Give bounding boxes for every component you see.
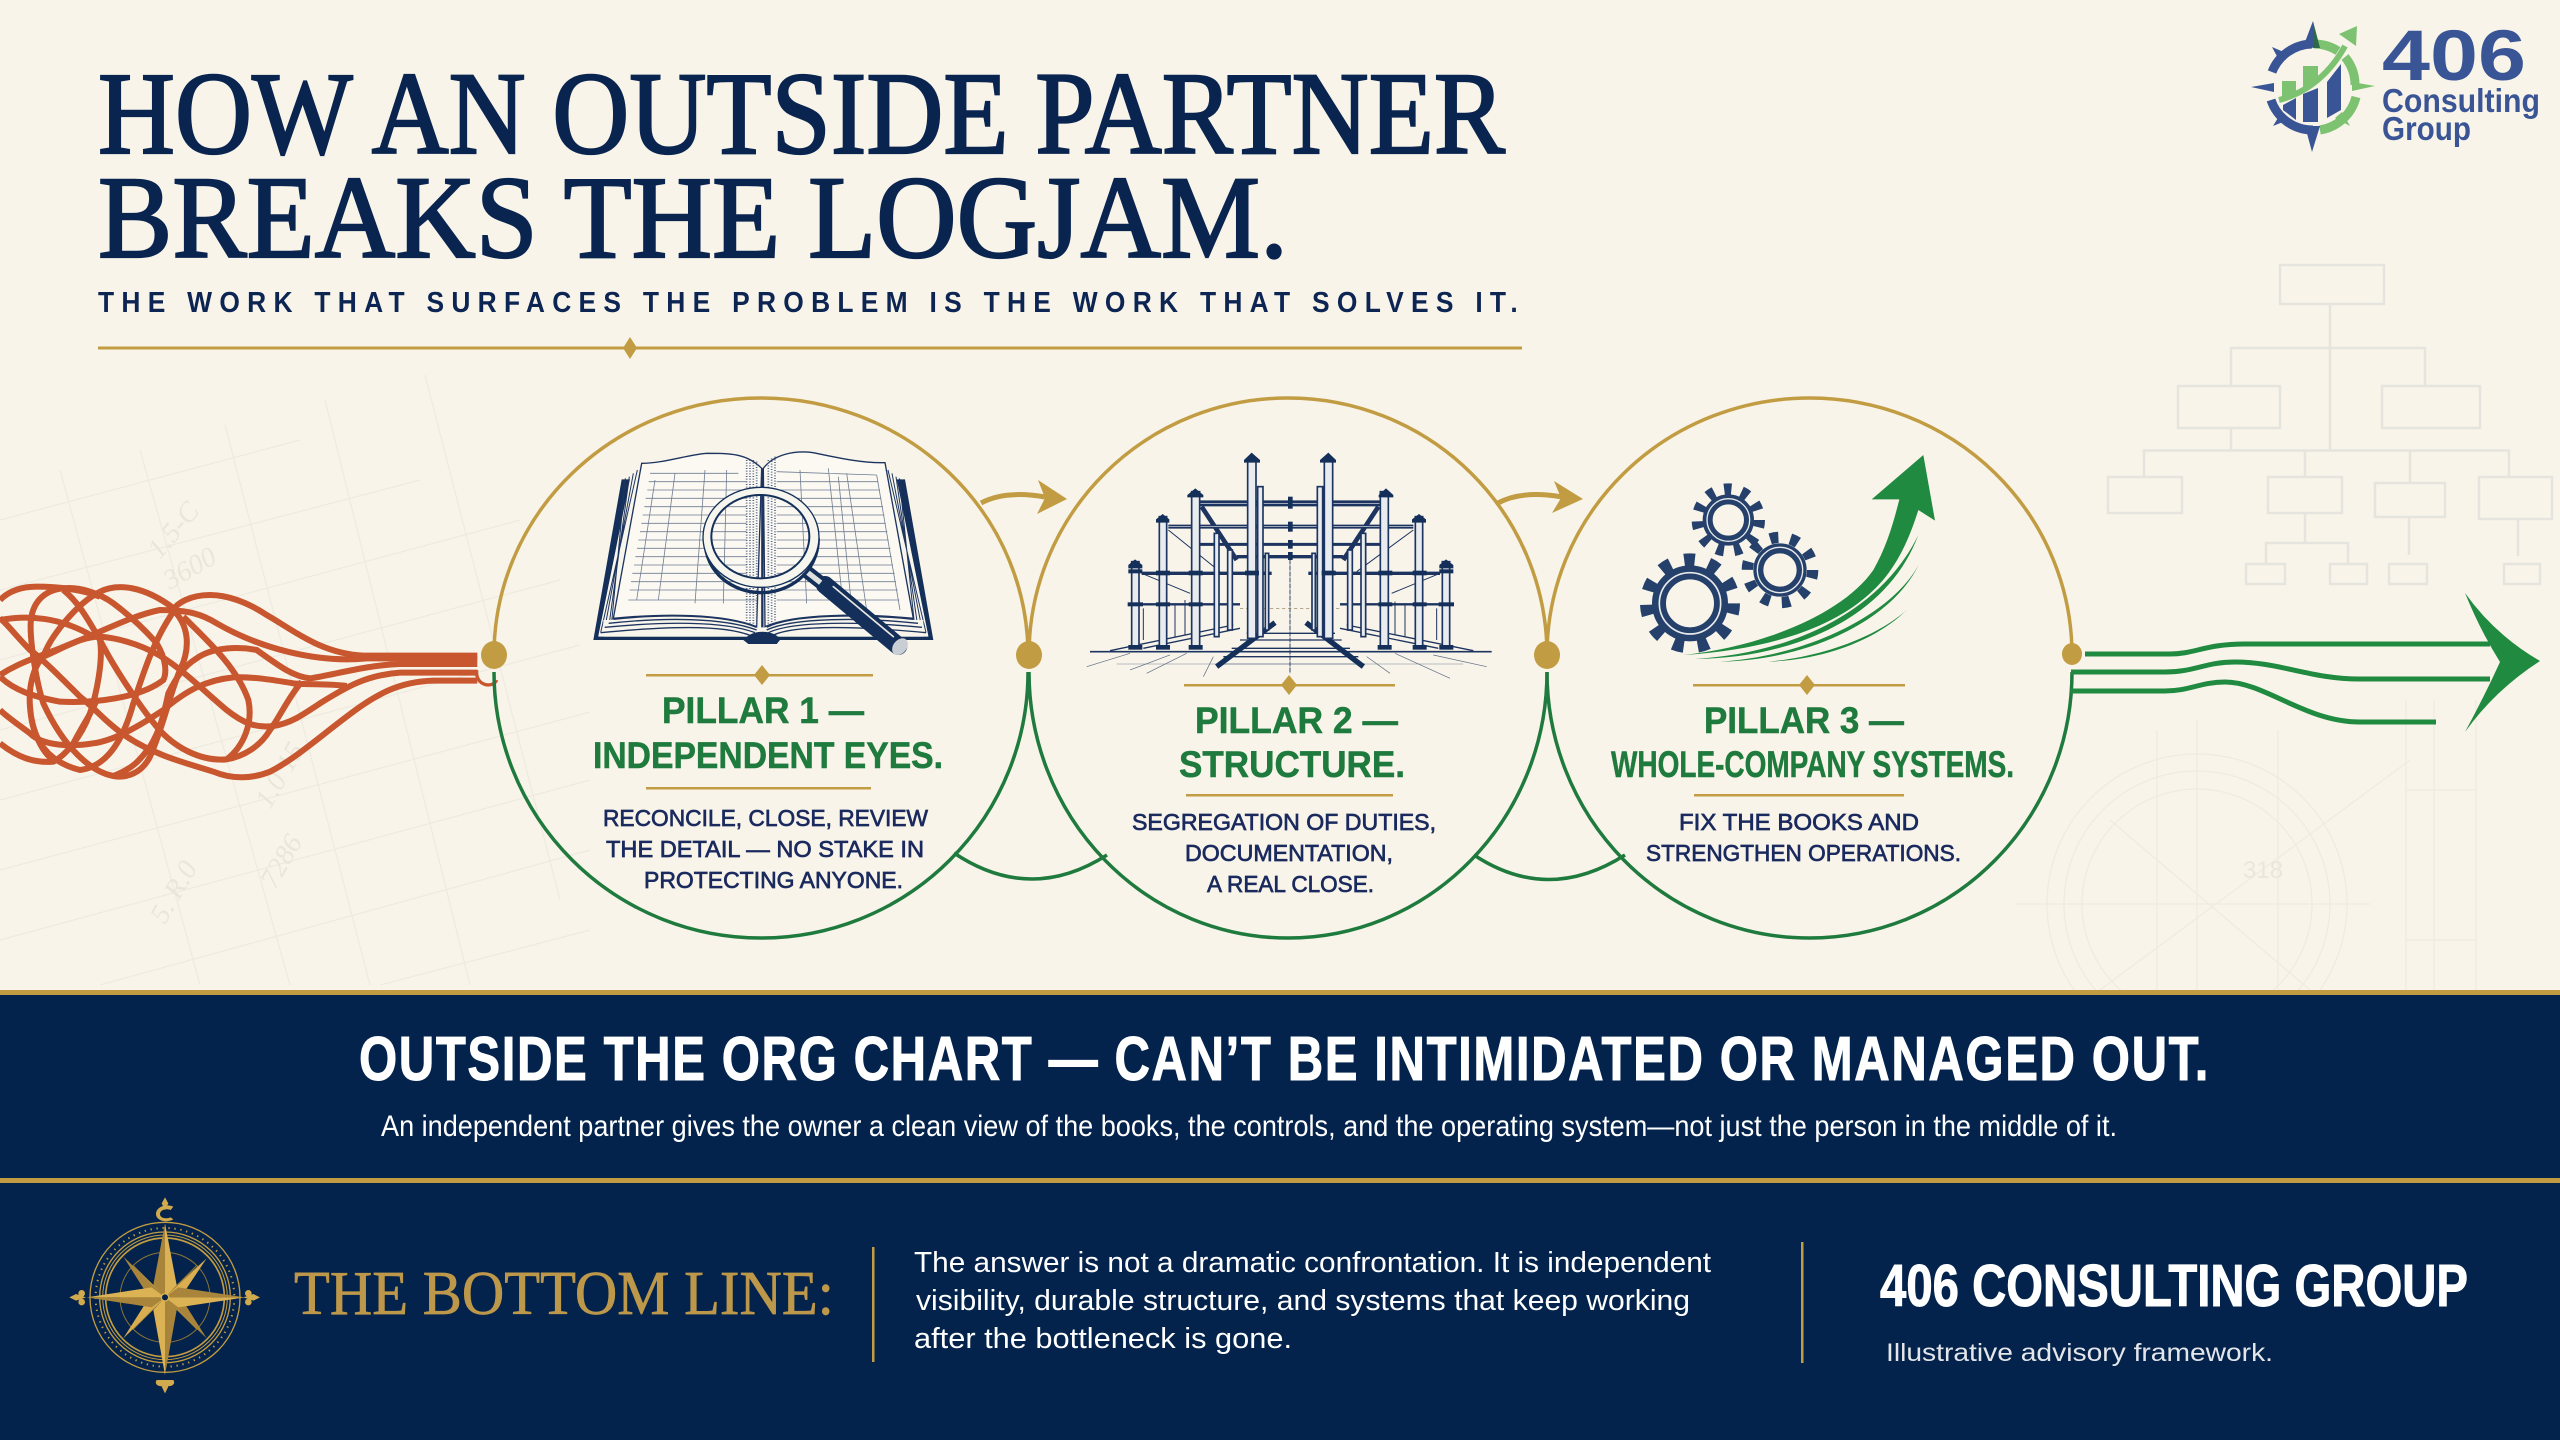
background: faint drafting compass sketch: 318 xyxy=(2243,857,2283,884)
background: faint ledger sheet xyxy=(0,375,590,985)
bottom line paragraph: The answer is not a dramatic confrontation. It is independent xyxy=(914,1247,1711,1279)
node dots xyxy=(481,641,2082,669)
pillar 3 heading: PILLAR 3 — xyxy=(1704,700,1904,741)
tangled input threads xyxy=(0,587,497,777)
band: outside the org chart xyxy=(359,1025,2210,1143)
pillar 2 text block xyxy=(1132,675,1436,897)
icon: ledger book with magnifying glass xyxy=(593,452,933,658)
book cover and page stack xyxy=(593,470,933,644)
pillar 2 description: A REAL CLOSE. xyxy=(1207,871,1374,897)
subtitle: THE WORK THAT SURFACES THE PROBLEM IS THE WORK THAT SOLVES IT. xyxy=(98,287,1525,319)
pillar 2 heading: PILLAR 2 — xyxy=(1195,700,1398,741)
spine xyxy=(745,632,780,644)
pillar 1 top divider xyxy=(646,665,873,685)
scaffold beams xyxy=(1128,503,1453,640)
gold connector arrows xyxy=(981,480,1583,514)
pillar 2 description xyxy=(1132,809,1436,897)
rising green arrow xyxy=(1683,455,1935,662)
title divider with diamond xyxy=(98,337,1522,359)
compass rings xyxy=(90,1222,240,1372)
icon: scaffolding structure xyxy=(1087,453,1492,678)
pillar 3 top divider xyxy=(1693,675,1905,695)
background: faint drafting compass sketch xyxy=(2015,700,2476,1054)
right gear xyxy=(1747,537,1813,603)
scaffold posts xyxy=(1132,458,1450,648)
scaffold caps and couplers xyxy=(1128,453,1454,650)
logo: 406 Consulting Group xyxy=(2251,17,2540,152)
pillar 3 heading: WHOLE-COMPANY SYSTEMS. xyxy=(1611,744,2014,785)
bottom line paragraph: after the bottleneck is gone. xyxy=(914,1323,1292,1355)
pillar 2 description: SEGREGATION OF DUTIES, xyxy=(1132,809,1436,835)
magnifier lens ring xyxy=(703,487,819,593)
background: faint ledger sheet: 7286 xyxy=(254,830,309,894)
pillar 2 top divider xyxy=(1184,675,1395,695)
open pages xyxy=(613,453,762,627)
ledger grid xyxy=(628,468,900,610)
pillar 2 heading xyxy=(1179,700,1405,785)
scaffold floor xyxy=(1087,560,1492,678)
pillar 1 heading xyxy=(593,690,943,776)
gold top arcs xyxy=(494,398,2072,655)
arrow: pillar 1 to pillar 2 xyxy=(981,480,1067,514)
logo: 406 Consulting Group: Group xyxy=(2382,110,2471,147)
navy footer background xyxy=(0,993,2560,1440)
pillar 1 text block xyxy=(593,665,943,893)
logo: 406 Consulting Group: Consulting xyxy=(2382,82,2540,119)
title: HOW AN OUTSIDE PARTNER xyxy=(98,48,1505,179)
pillar 3 description: STRENGTHEN OPERATIONS. xyxy=(1646,840,1961,866)
pillar 1 description: PROTECTING ANYONE. xyxy=(644,867,903,893)
page gutter hatching xyxy=(747,457,775,625)
bottom line paragraph: visibility, durable structure, and systems that keep working xyxy=(916,1285,1690,1317)
icon: gold compass rose xyxy=(69,1197,260,1393)
clean output arrow xyxy=(2071,593,2540,732)
logo compass mark xyxy=(2251,21,2375,152)
pillar 2 heading: STRUCTURE. xyxy=(1179,744,1405,785)
top gear xyxy=(1697,489,1759,551)
bottom line paragraph xyxy=(914,1247,1711,1355)
pillar 2 description: DOCUMENTATION, xyxy=(1185,840,1393,866)
title: BREAKS THE LOGJAM. xyxy=(98,152,1288,283)
arrow: pillar 2 to pillar 3 xyxy=(1498,481,1583,513)
divider: brand xyxy=(1801,1242,1804,1363)
pillar circles chain xyxy=(494,398,2072,938)
pillar 1 description: THE DETAIL — NO STAKE IN xyxy=(606,836,924,862)
background: faint ledger sheet: 1.0 15 xyxy=(249,737,311,814)
green bottom arcs xyxy=(494,672,2072,938)
the bottom line label: THE BOTTOM LINE: xyxy=(294,1260,834,1328)
icon: gears with rising arrow xyxy=(1647,455,1935,662)
pillar 1 heading: PILLAR 1 — xyxy=(662,690,864,731)
pillar 3 description xyxy=(1646,809,1961,866)
gold band rules xyxy=(0,990,2560,1183)
large gear xyxy=(1647,560,1733,647)
pillar 1 description: RECONCILE, CLOSE, REVIEW xyxy=(603,805,928,831)
pillar 1 description xyxy=(603,805,928,893)
pillar 3 text block xyxy=(1611,675,2014,866)
background: faint ledger sheet: 1.5-C xyxy=(142,496,206,564)
background: faint org chart xyxy=(2108,265,2552,584)
background: faint ledger sheet: 3600 xyxy=(157,541,222,597)
logo: 406 Consulting Group: 406 xyxy=(2382,17,2526,96)
pillar 3 heading xyxy=(1611,700,2014,785)
pillar 3 description: FIX THE BOOKS AND xyxy=(1679,809,1919,835)
compass finials xyxy=(69,1197,260,1393)
footnote: Illustrative advisory framework. xyxy=(1886,1339,2273,1367)
title xyxy=(98,48,1505,283)
cardinal star points xyxy=(87,1223,245,1375)
magnifier handle xyxy=(807,572,911,658)
pillar 1 heading: INDEPENDENT EYES. xyxy=(593,735,943,776)
diagonal star points xyxy=(123,1257,207,1338)
divider: bottom line xyxy=(872,1247,874,1362)
band: outside the org chart: An independent partner gives the owner a clean view of the books, the controls, and the operating system—not just the person in the middle of it. xyxy=(381,1110,2117,1143)
background: faint ledger sheet: 5. R.0 xyxy=(144,856,204,928)
